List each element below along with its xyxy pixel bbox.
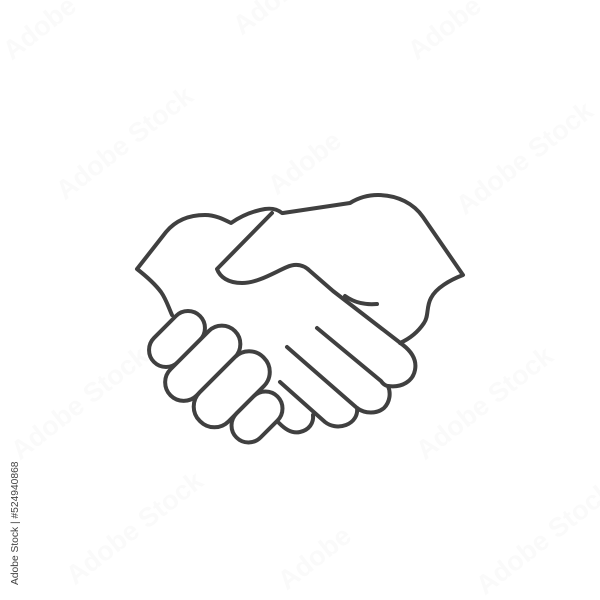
stock id caption: Adobe Stock | #524940868	[10, 461, 21, 585]
text: Adobe	[272, 520, 357, 596]
right hand thumb and cuff	[283, 195, 463, 343]
right hand finger two	[280, 382, 357, 426]
left hand outline	[137, 209, 282, 315]
left hand finger two	[157, 318, 248, 409]
right hand finger three	[279, 415, 313, 432]
right hand finger one	[287, 328, 390, 412]
text: Adobe Stock	[60, 465, 209, 591]
left hand finger one	[142, 304, 212, 374]
thumb	[217, 213, 415, 386]
left hand finger three	[185, 343, 278, 436]
text: Adobe Stock	[450, 95, 599, 221]
left hand finger four	[224, 384, 290, 450]
text: Adobe Stock	[50, 80, 199, 206]
text: Adobe	[262, 125, 347, 201]
thumb crease	[345, 296, 377, 304]
text: Adobe Stock	[410, 340, 559, 466]
text: Adobe Stock	[5, 340, 154, 466]
icon: handshake	[137, 195, 463, 450]
